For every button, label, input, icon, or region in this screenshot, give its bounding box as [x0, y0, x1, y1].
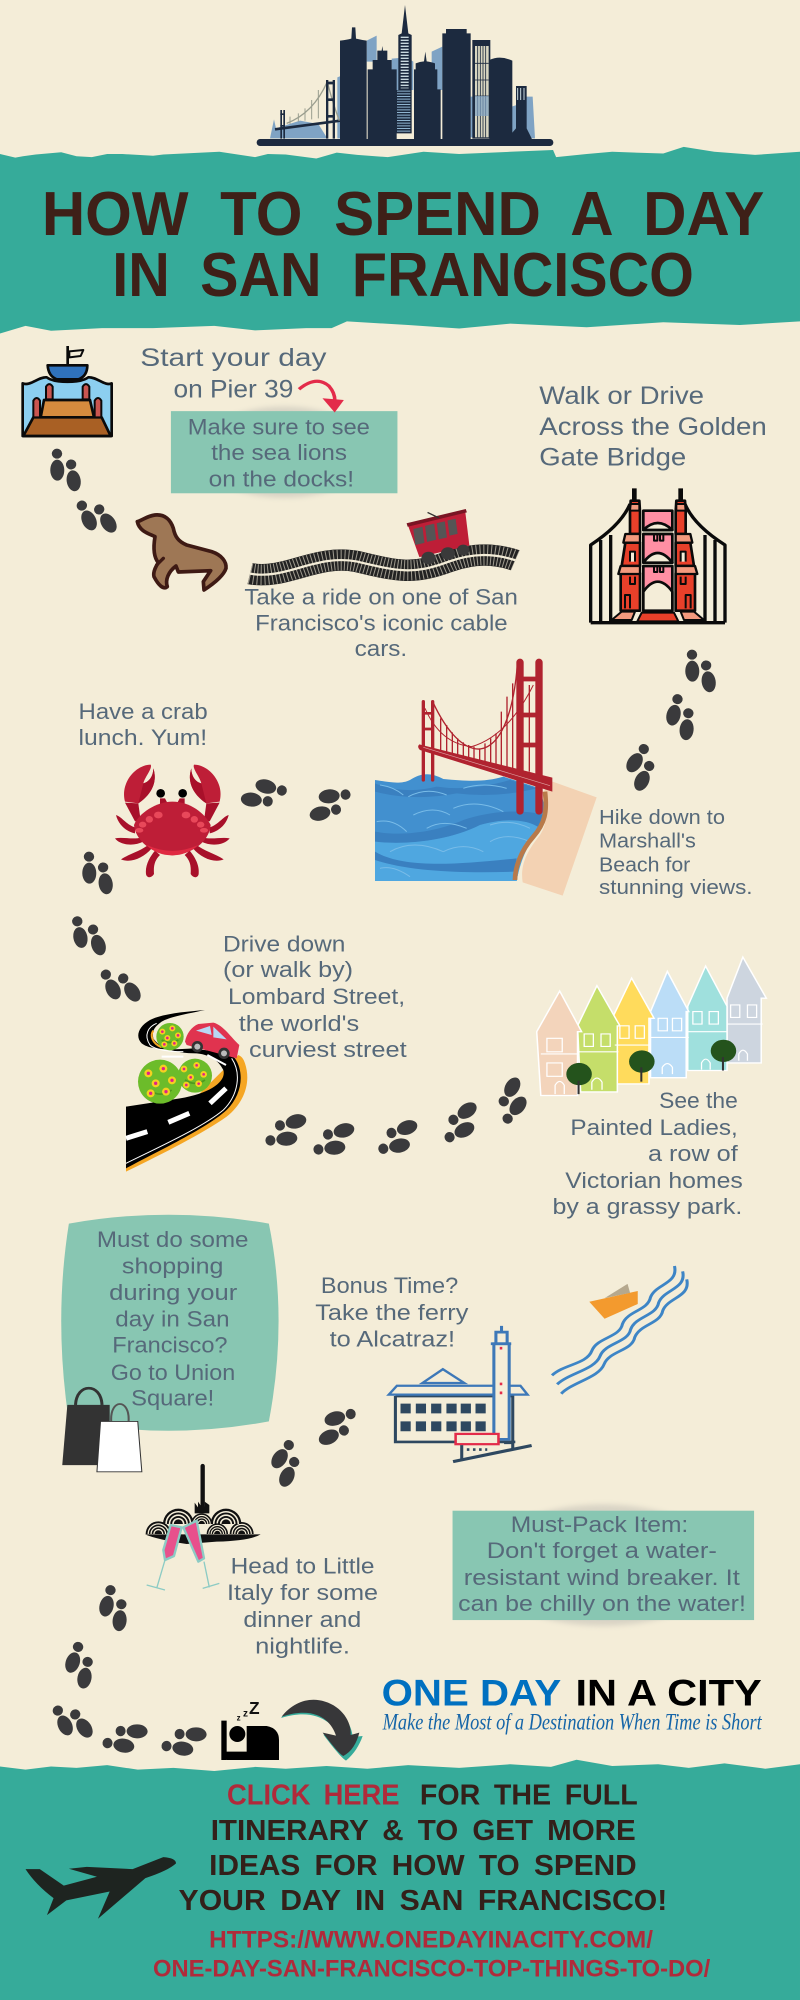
callout: must-pack item: Don't forget a water- — [487, 1538, 717, 1563]
text: cable cars — [244, 585, 518, 661]
icon: sleeping in bed: z — [237, 1714, 241, 1723]
title banner — [0, 147, 800, 333]
footer call to action text: IDEAS FOR HOW TO SPEND — [209, 1849, 637, 1881]
text: little italy: Italy for some — [227, 1580, 378, 1605]
callout: must-pack item: Must-Pack Item: — [511, 1513, 688, 1537]
text: walk or drive: Across the Golden — [539, 413, 767, 441]
footprint trail: golden gate to beach — [616, 647, 717, 794]
text: walk or drive: Gate Bridge — [539, 443, 686, 471]
icon: cable car tracks — [250, 555, 515, 575]
footer url — [153, 1927, 710, 1982]
text: painted ladies: Victorian homes — [565, 1168, 743, 1193]
footprint trail: little italy to bed — [47, 1583, 208, 1758]
icon: airplane — [26, 1857, 176, 1919]
icon: golden gate bridge front — [591, 488, 725, 623]
footer call to action text: YOUR DAY IN SAN FRANCISCO! — [179, 1884, 667, 1917]
text: bonus time — [315, 1273, 469, 1351]
footer url: HTTPS://WWW.ONEDAYINACITY.COM/ — [209, 1927, 653, 1953]
callout: sea lions — [171, 407, 397, 498]
callout: shopping blob: day in San — [115, 1307, 230, 1331]
text: crab lunch: lunch. Yum! — [79, 726, 207, 750]
text: marshall's beach: Hike down to — [599, 805, 725, 829]
text: lombard street: (or walk by) — [223, 958, 353, 982]
icon: shopping bags — [62, 1388, 142, 1472]
callout: shopping blob — [61, 1215, 279, 1431]
text: start your day: Start your day — [140, 344, 327, 372]
text: little italy: nightlife. — [255, 1634, 350, 1658]
text: marshall's beach: stunning views. — [599, 876, 753, 899]
callout: sea lions: Make sure to see — [188, 415, 370, 439]
text: walk or drive — [539, 382, 767, 471]
title text — [42, 180, 764, 310]
text: lombard street: curviest street — [249, 1038, 407, 1062]
callout: shopping blob: Francisco? — [112, 1333, 228, 1357]
text: painted ladies — [553, 1088, 743, 1219]
text: start your day — [140, 344, 327, 403]
text: cable cars: Francisco's iconic cable — [255, 611, 508, 635]
text: painted ladies: a row of — [648, 1142, 738, 1166]
callout: must-pack item: resistant wind breaker. It — [464, 1565, 740, 1589]
text: marshall's beach: Marshall's — [599, 829, 696, 852]
logo: one day in a city: IN A CITY — [576, 1672, 762, 1714]
text: little italy — [227, 1554, 378, 1658]
text: little italy: Head to Little — [231, 1554, 374, 1578]
footer url: ONE-DAY-SAN-FRANCISCO-TOP-THINGS-TO-DO/ — [153, 1956, 710, 1982]
text: little italy: dinner and — [243, 1607, 361, 1631]
logo: one day in a city — [382, 1672, 763, 1735]
icon: sleeping in bed: z — [243, 1709, 248, 1720]
text: lombard street — [223, 932, 407, 1062]
callout: shopping blob: shopping — [122, 1254, 223, 1278]
callout: must-pack item: can be chilly on the water! — [458, 1592, 746, 1616]
callout: must-pack item — [453, 1504, 754, 1626]
icon: sleeping in bed: Z — [249, 1698, 260, 1718]
footprint trail: lombard to painted ladies — [261, 1074, 538, 1159]
text: bonus time: Take the ferry — [315, 1300, 469, 1325]
text: cable cars: cars. — [355, 637, 407, 661]
text: painted ladies: See the — [659, 1088, 738, 1113]
text: marshall's beach: Beach for — [599, 853, 690, 876]
footer call to action text: ITINERARY & TO GET MORE — [211, 1814, 636, 1847]
text: crab lunch: Have a crab — [79, 700, 208, 724]
text: lombard street: Drive down — [223, 932, 345, 956]
callout: sea lions: on the docks! — [209, 467, 354, 491]
icon: sea lion — [137, 515, 226, 590]
skyline illustration — [257, 5, 553, 146]
text: lombard street: the world's — [239, 1012, 359, 1036]
callout: shopping blob: during your — [109, 1280, 237, 1305]
footprint trail: crab to lombard — [67, 849, 145, 1013]
callout: shopping blob: Square! — [131, 1386, 214, 1410]
callout: shopping blob: Must do some — [97, 1227, 248, 1251]
icon: crab — [115, 765, 230, 877]
illustration: golden gate bridge and marshall's beach — [375, 662, 597, 896]
text: bonus time: Bonus Time? — [321, 1273, 458, 1297]
text: marshall's beach — [599, 805, 753, 899]
text: walk or drive: Walk or Drive — [539, 382, 704, 410]
footer banner — [0, 1760, 800, 2000]
footer call to action text: CLICK HERE — [227, 1778, 399, 1811]
footprint trail: beach to crab — [239, 775, 355, 823]
footprint trail: pier to sea lion — [48, 446, 121, 544]
text: painted ladies: Painted Ladies, — [570, 1115, 738, 1139]
icon: ferry and waves — [552, 1266, 687, 1394]
callout: shopping blob: Go to Union — [111, 1360, 235, 1385]
text: lombard street: Lombard Street, — [228, 984, 405, 1009]
text: painted ladies: by a grassy park. — [553, 1195, 742, 1219]
arrow: to footer — [281, 1700, 363, 1761]
icon: cable car — [407, 511, 469, 564]
footer call to action text: FOR THE FULL — [420, 1778, 638, 1811]
footer call to action text — [179, 1778, 667, 1917]
icon: alcatraz — [389, 1326, 532, 1462]
arrow: red curved arrow — [299, 381, 344, 412]
text: crab lunch — [79, 700, 208, 750]
icon: pasta plate and wine glasses — [145, 1466, 261, 1590]
icon: sleeping in bed — [221, 1698, 279, 1760]
text: bonus time: to Alcatraz! — [330, 1327, 455, 1351]
footprint trail: alcatraz to little italy — [261, 1404, 363, 1490]
illustration: painted ladies houses — [537, 957, 766, 1096]
icon: lombard street road — [126, 1010, 247, 1172]
text: cable cars: Take a ride on one of San — [244, 585, 518, 609]
logo: one day in a city: ONE DAY — [382, 1672, 561, 1714]
callout: sea lions: the sea lions — [211, 441, 347, 465]
text: start your day: on Pier 39 — [173, 375, 293, 403]
icon: pier 39 — [23, 346, 112, 436]
